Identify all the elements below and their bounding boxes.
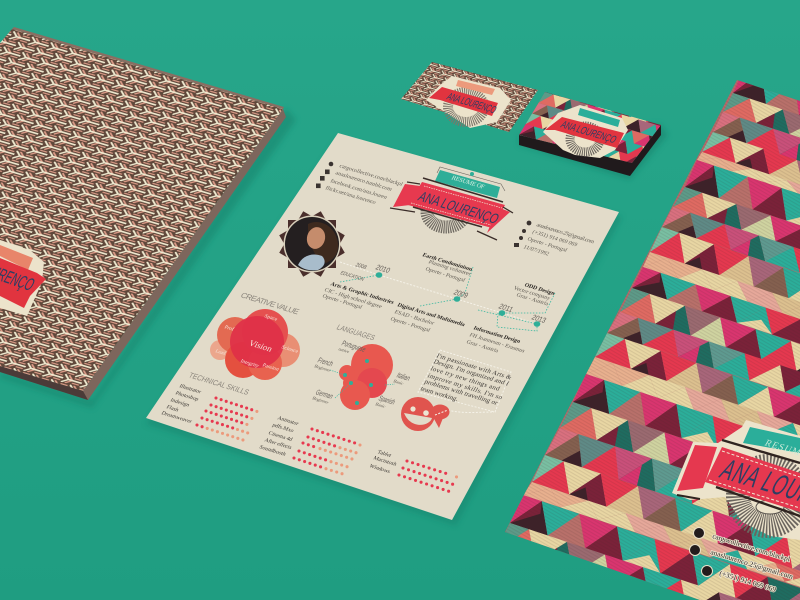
contact list left bbox=[316, 162, 404, 206]
card logo: ANA LOURENÇO bbox=[445, 90, 499, 116]
skill dots column 3 bbox=[399, 461, 458, 492]
about text: team working. bbox=[419, 386, 460, 403]
panel: notebook bbox=[0, 27, 296, 408]
contact list right: Oporto - Portugal bbox=[526, 237, 568, 254]
about text bbox=[418, 350, 514, 412]
venn diagram bbox=[210, 309, 300, 380]
poster contacts: cargocollective.com/blackpl bbox=[711, 532, 791, 563]
skill dots column 2 bbox=[294, 429, 361, 474]
skill labels column 2: Soundbooth bbox=[258, 445, 287, 458]
language bubble chart bbox=[311, 339, 412, 410]
card stack face bbox=[519, 92, 661, 163]
business card stack bbox=[519, 92, 667, 180]
language bubble chart: Beginner bbox=[313, 364, 332, 373]
skill labels column 3 bbox=[368, 450, 398, 475]
notebook edges bbox=[0, 109, 286, 400]
skill labels column 1 bbox=[160, 384, 202, 425]
header banner: RESUME OF bbox=[450, 175, 486, 191]
poster contacts bbox=[690, 528, 795, 594]
sunburst bbox=[738, 466, 798, 526]
language bubble chart: native bbox=[337, 347, 351, 354]
contact list left: cargocollective.com/blackpl bbox=[338, 164, 404, 188]
timeline bbox=[339, 262, 555, 331]
language bubble chart: Spanish bbox=[377, 394, 397, 406]
education: Information Design: FH Joanneum - Erasmus bbox=[468, 333, 526, 354]
card stack logo bbox=[543, 105, 628, 158]
experience: ODD Design: ODD Design bbox=[523, 283, 556, 297]
education: Digital Arts and Multimedia: ESAD - Bachelor bbox=[393, 310, 435, 327]
venn diagram: Space bbox=[263, 314, 279, 323]
education: Information Design: Information Design bbox=[472, 326, 522, 345]
experience: ODD Design: Graz - Austria bbox=[515, 293, 550, 307]
card stack logo: ANA LOURENÇO bbox=[559, 118, 619, 145]
education: Digital Arts and Multimedia: Oporto - Portugal bbox=[389, 317, 431, 334]
contact list right: 11/07/1992 bbox=[522, 245, 550, 257]
header banner bbox=[390, 167, 513, 240]
contact list left: flickr.net/ana.lourenco bbox=[324, 185, 377, 206]
about text: problems with travelling or bbox=[423, 379, 500, 407]
education: Arts and Graphic Industries: CIC - High school degree bbox=[323, 288, 383, 310]
panel: resume sheet bbox=[146, 133, 622, 526]
timeline: EDUCATION bbox=[339, 271, 365, 283]
poster banner bbox=[672, 420, 800, 540]
skill labels column 1: Photoshop bbox=[174, 391, 200, 403]
skill labels column 1: Illustrator bbox=[178, 384, 202, 395]
poster contacts: (+351) 914 069 069 bbox=[718, 568, 778, 594]
about text: Design. I'm organized and I bbox=[432, 359, 510, 387]
contact list left: facebook.com/ana.louren bbox=[329, 178, 389, 201]
experience: ODD Design bbox=[512, 283, 556, 307]
education: Digital Arts and Multimedia: Digital Arts and Multimedia bbox=[396, 303, 466, 328]
timeline: 2008 bbox=[354, 263, 368, 271]
skill labels column 2: pdfs.Mxo bbox=[271, 422, 295, 434]
experience: Earth Condominium bbox=[421, 253, 474, 284]
venn diagram: Lead bbox=[214, 349, 227, 357]
timeline: 2011 bbox=[497, 302, 515, 314]
notebook cover pattern bbox=[0, 29, 283, 391]
business card: pattern bbox=[401, 62, 538, 132]
icon: smiley speech bubble bbox=[401, 397, 494, 431]
venn diagram: Science bbox=[280, 345, 300, 355]
heading: creative value: CREATIVE VALUE bbox=[239, 291, 301, 316]
timeline: 2010 bbox=[374, 263, 392, 275]
heading: technical skills: TECHNICAL SKILLS bbox=[187, 371, 251, 397]
notebook banner bbox=[0, 240, 46, 316]
skill labels column 2: Animator bbox=[276, 416, 300, 427]
experience: Earth Condominium: Oporto - Portugal bbox=[424, 267, 466, 284]
skill labels column 3: Tablet bbox=[376, 450, 393, 459]
education: Information Design: Graz - Austria bbox=[465, 340, 500, 354]
notebook top edge bbox=[12, 27, 284, 109]
about text: improve my skills. I'm so bbox=[426, 373, 504, 401]
education: Arts and Graphic Industries: Oporto - Portugal bbox=[321, 294, 363, 311]
panel: triangle pattern poster bbox=[497, 66, 800, 600]
skill labels column 1: Flash bbox=[165, 405, 180, 413]
timeline: 2009 bbox=[452, 288, 470, 300]
skill labels column 1: Indesign bbox=[169, 398, 191, 408]
sunburst bbox=[427, 197, 465, 227]
venn diagram: Prof bbox=[223, 324, 236, 333]
about text: love try new things and bbox=[429, 366, 502, 393]
profile photo bbox=[279, 211, 345, 277]
skill labels column 3: Windows bbox=[368, 464, 391, 475]
card stack side bbox=[519, 125, 661, 176]
contact list left: anaslourenco.tumblr.com bbox=[334, 171, 394, 193]
language bubble chart: Beginner bbox=[311, 396, 330, 405]
language bubble chart: Basic bbox=[392, 379, 405, 386]
language bubble chart: Portuguese bbox=[340, 339, 368, 354]
language bubble chart: Italian bbox=[395, 371, 412, 382]
skill labels column 2: Cinema 4d bbox=[267, 431, 294, 443]
contact list right: anaslourenco.25@gmail.com bbox=[535, 223, 596, 245]
language bubble chart: Basic bbox=[374, 402, 387, 409]
experience: Earth Condominium: Planning volunteer bbox=[427, 260, 472, 277]
venn diagram: Passion bbox=[261, 363, 280, 373]
poster contacts: anaslourenco.25@gmail.com bbox=[709, 547, 795, 581]
contact list right bbox=[514, 221, 596, 257]
venn diagram: Vision bbox=[247, 338, 275, 354]
skill labels column 3: Macintosh bbox=[372, 456, 398, 468]
skill labels column 2 bbox=[258, 416, 300, 458]
contact list right: (+351) 914 069 069 bbox=[531, 229, 579, 248]
triangle rows bbox=[497, 66, 800, 600]
skill dots column 1 bbox=[197, 398, 262, 440]
skill labels column 2: After effects bbox=[263, 437, 293, 451]
timeline: 2013 bbox=[530, 313, 548, 325]
about text: I'm passionate with Arts & bbox=[435, 353, 514, 381]
experience: ODD Design: Vector company bbox=[512, 286, 551, 302]
education: Arts and Graphic Industries: Arts & Graphic Industries bbox=[329, 282, 396, 306]
language bubble chart: German bbox=[314, 388, 335, 401]
header banner: ANA LOURENÇO bbox=[415, 190, 501, 227]
language bubble chart: French bbox=[316, 356, 335, 368]
experience: Earth Condominium: Earth Condominium bbox=[421, 253, 474, 273]
skill labels column 1: Dreamweaver bbox=[160, 411, 193, 425]
venn diagram: Integrity bbox=[239, 359, 260, 369]
heading: languages: LANGUAGES bbox=[335, 323, 377, 342]
